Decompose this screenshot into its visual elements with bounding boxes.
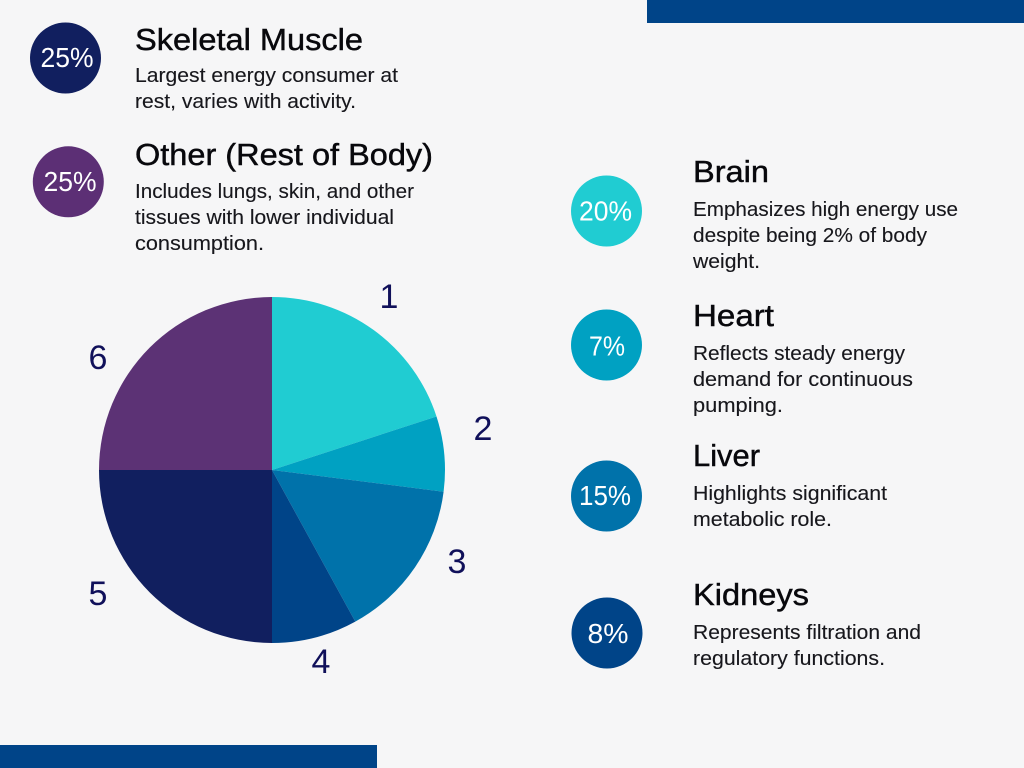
text: heart description: demand for continuous [693, 368, 913, 391]
pie label 3: 3 [448, 543, 466, 581]
panel: heart [571, 298, 913, 417]
text: skeletal muscle description: Largest energy consumer at [135, 64, 398, 87]
text: other description: Includes lungs, skin, and other [135, 180, 414, 203]
pie label 2: 2 [474, 410, 492, 448]
heading: skeletal muscle: Skeletal Muscle [135, 22, 363, 57]
slice 5: skeletal muscle [99, 470, 272, 643]
slice 6: other [99, 297, 272, 470]
slice 4: kidneys [272, 470, 355, 643]
pie chart [99, 297, 445, 643]
text: liver description: metabolic role. [693, 508, 832, 531]
icon: other 25% badge: 25% [44, 166, 96, 197]
slice 1: brain [272, 297, 436, 470]
text: kidneys description [693, 621, 921, 670]
text: kidneys description: Represents filtration and [693, 621, 921, 644]
text: kidneys description: regulatory functions. [693, 647, 885, 670]
icon: liver 15% badge [571, 460, 642, 532]
icon: brain 20% badge: 20% [579, 196, 632, 226]
text: other description [135, 180, 414, 255]
text: other description: tissues with lower individual [135, 206, 394, 229]
text: heart description: pumping. [693, 394, 783, 417]
icon: heart 7% badge: 7% [589, 330, 625, 362]
slice 2: heart [272, 416, 445, 492]
heading: kidneys: Kidneys [693, 577, 809, 612]
bottom accent bar [0, 745, 377, 768]
icon: heart 7% badge [571, 310, 642, 380]
icon: skeletal muscle 25% badge: 25% [40, 42, 94, 73]
text: brain description: weight. [692, 250, 760, 273]
text: brain description: Emphasizes high energy use [693, 198, 958, 221]
text: liver description [693, 482, 887, 531]
panel: other [33, 137, 433, 255]
icon: liver 15% badge: 15% [579, 480, 631, 511]
panel: skeletal muscle [30, 22, 398, 113]
pie label 4: 4 [312, 643, 330, 681]
text: heart description: Reflects steady energy [693, 342, 906, 365]
pie label 6: 6 [89, 339, 107, 377]
text: brain description: despite being 2% of body [693, 224, 928, 247]
text: skeletal muscle description [135, 64, 398, 113]
icon: brain 20% badge [571, 176, 642, 246]
icon: kidneys 8% badge [572, 598, 642, 668]
panel: kidneys [572, 577, 921, 670]
heading: other: Other (Rest of Body) [135, 137, 433, 172]
text: liver description: Highlights significant [693, 482, 887, 505]
text: heart description [693, 342, 913, 417]
slice 3: liver [272, 470, 444, 622]
pie label 5: 5 [89, 575, 107, 613]
icon: other 25% badge [33, 146, 104, 217]
text: skeletal muscle description: rest, varies with activity. [135, 90, 356, 113]
pie label 1: 1 [380, 278, 398, 316]
text: other description: consumption. [135, 232, 264, 255]
top accent bar [647, 0, 1024, 23]
text: brain description [692, 198, 958, 273]
panel: brain [571, 154, 958, 273]
heading: brain: Brain [693, 154, 769, 189]
heading: heart: Heart [693, 298, 774, 333]
panel: liver [571, 438, 887, 532]
icon: skeletal muscle 25% badge [30, 22, 101, 94]
icon: kidneys 8% badge: 8% [588, 618, 628, 649]
heading: liver: Liver [693, 438, 760, 473]
